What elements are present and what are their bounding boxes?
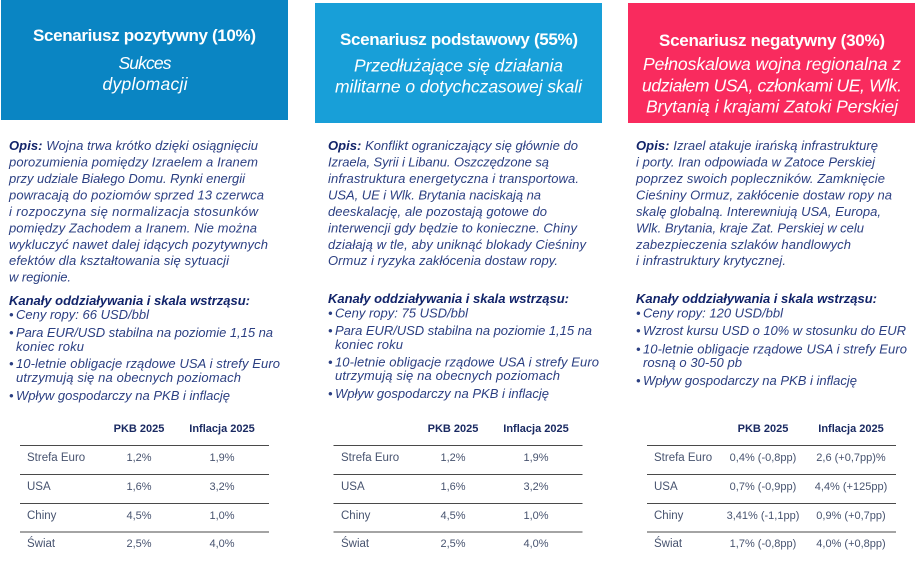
transmission channels list: • <box>328 323 333 338</box>
description text: Opis: Izrael atakuje irańską infrastrukturę <box>636 138 878 153</box>
description text: przy udziale Białego Domu. Rynki energii <box>8 171 246 186</box>
transmission channels list: Ceny ropy: 66 USD/bbl <box>16 307 150 322</box>
description text: działają w tle, aby uniknąć blokady Cieśniny <box>328 237 588 252</box>
description text: zabezpieczenia szlaków handlowych <box>635 237 851 252</box>
table: forecasts: 1,7% (-0,8pp) <box>730 538 796 550</box>
transmission channels list: rosną o 30-50 pb <box>643 355 742 370</box>
transmission channels list: Kanały oddziaływania i skala wstrząsu: <box>328 291 569 306</box>
transmission channels list: 10-letnie obligacje rządowe USA i strefy Euro <box>643 342 907 356</box>
description text: Opis: Wojna trwa krótko dzięki osiągnięciu <box>9 138 258 153</box>
description text: Cieśniny Ormuz, zakłócenie dostaw ropy na <box>636 188 892 202</box>
panel: base scenario <box>315 3 602 550</box>
table: forecasts <box>334 423 582 550</box>
table: forecasts: 1,6% <box>126 481 152 493</box>
transmission channels list: • <box>328 306 333 320</box>
description text: USA, UE i Wlk. Brytania naciskają na <box>328 188 541 202</box>
transmission channels list: Ceny ropy: 75 USD/bbl <box>335 306 469 320</box>
table: forecasts: 3,2% <box>523 481 549 493</box>
header: base scenario <box>315 3 602 123</box>
table: forecasts: Chiny <box>654 510 684 522</box>
transmission channels list: • <box>9 356 14 371</box>
header: positive scenario: Scenariusz pozytywny (10%) <box>33 26 256 45</box>
transmission channels list: • <box>636 342 641 356</box>
transmission channels list: • <box>636 306 641 320</box>
table: forecasts: PKB 2025 <box>428 423 478 435</box>
transmission channels list: • <box>636 373 641 388</box>
table: forecasts: Świat <box>27 537 56 550</box>
description text: wykluczyć nawet dalej idących pozytywnych <box>9 237 268 252</box>
panel: negative scenario <box>628 3 915 550</box>
table: forecasts: 1,6% <box>440 481 466 493</box>
description text: poprzez swoich popleczników. Zamknięcie <box>635 171 885 186</box>
transmission channels list: • <box>9 325 14 340</box>
description text: i rozpoczyna się normalizacja stosunków <box>9 204 260 219</box>
description text: Opis: Konflikt ograniczający się głównie do <box>328 138 578 153</box>
description text: i porty. Iran odpowiada w Zatoce Perskiej <box>636 154 876 170</box>
header: negative scenario: Pełnoskalowa wojna regionalna z <box>643 54 901 74</box>
description text: interwencji gdy będzie to konieczne. Chiny <box>328 220 578 236</box>
description text: i infrastruktury krytycznej. <box>636 253 786 268</box>
table: forecasts: Strefa Euro <box>341 452 399 464</box>
table: forecasts: 1,2% <box>440 452 466 464</box>
description text: Izraela, Syrii i Libanu. Oszczędzone są <box>328 154 549 170</box>
description text: w regionie. <box>9 270 71 284</box>
table: forecasts: 4,0% <box>523 538 549 550</box>
table: forecasts: 4,5% <box>126 510 152 522</box>
table: forecasts: 2,5% <box>126 538 152 550</box>
description text: skalę globalną. Interewniują USA, Europa, <box>636 204 881 219</box>
table: forecasts: 2,6 (+0,7pp)% <box>816 452 886 464</box>
header: negative scenario: Scenariusz negatywny (30%) <box>659 31 885 50</box>
description text: powracają do poziomów sprzed 13 czerwca <box>8 188 264 202</box>
transmission channels list: Para EUR/USD stabilna na poziomie 1,15 na <box>16 325 273 340</box>
table: forecasts: PKB 2025 <box>114 423 164 435</box>
table: forecasts: Strefa Euro <box>27 452 85 464</box>
table: forecasts: 1,2% <box>126 452 152 464</box>
transmission channels list: 10-letnie obligacje rządowe USA i strefy Euro <box>335 354 599 370</box>
description text: pomiędzy Zachodem a Iranem. Nie można <box>8 220 257 236</box>
transmission channels list <box>636 291 907 388</box>
transmission channels list: utrzymują się na obecnych poziomach <box>16 370 241 385</box>
table: forecasts: Strefa Euro <box>654 452 712 464</box>
table: forecasts: 2,5% <box>440 538 466 550</box>
transmission channels list: Ceny ropy: 120 USD/bbl <box>643 306 784 320</box>
table: forecasts: Chiny <box>341 510 371 522</box>
header: negative scenario <box>628 3 915 123</box>
transmission channels list: Wpływ gospodarczy na PKB i inflację <box>335 386 549 401</box>
description text: efektów dla kształtowania się sytuacji <box>9 253 230 268</box>
transmission channels list: • <box>328 386 333 401</box>
transmission channels list: 10-letnie obligacje rządowe USA i strefy Euro <box>16 356 280 371</box>
table: forecasts: 4,0% <box>209 538 235 550</box>
table: forecasts: USA <box>27 481 51 493</box>
header: base scenario: militarne o dotychczasowej skali <box>335 76 583 96</box>
transmission channels list: utrzymują się na obecnych poziomach <box>335 368 560 383</box>
table: forecasts: Inflacja 2025 <box>503 423 569 435</box>
transmission channels list: koniec roku <box>16 339 84 354</box>
table: forecasts: 1,0% <box>209 510 235 522</box>
header: negative scenario: Brytanią i krajami Zatoki Perskiej <box>646 96 899 116</box>
transmission channels list: • <box>9 307 14 322</box>
table: forecasts: 0,7% (-0,9pp) <box>730 481 796 493</box>
description text: infrastruktura energetyczna i transportowa. <box>328 171 579 186</box>
transmission channels list: Kanały oddziaływania i skala wstrząsu: <box>9 293 250 308</box>
table: forecasts: USA <box>654 481 678 493</box>
header: negative scenario: udziałem USA, członkami UE, Wlk. <box>642 76 902 96</box>
description text: deeskalację, ale pozostają gotowe do <box>328 204 547 219</box>
header: base scenario: Przedłużające się działania <box>354 56 563 76</box>
transmission channels list: Wzrost kursu USD o 10% w stosunku do EUR <box>643 323 906 338</box>
header: base scenario: Scenariusz podstawowy (55%) <box>340 30 578 49</box>
table: forecasts: 4,0% (+0,8pp) <box>816 538 886 550</box>
table: forecasts: 3,41% (-1,1pp) <box>727 510 799 522</box>
table: forecasts: Chiny <box>27 510 57 522</box>
panel: positive scenario <box>1 0 288 550</box>
table: forecasts <box>647 423 896 550</box>
description text <box>8 138 268 284</box>
transmission channels list <box>328 291 599 401</box>
table: forecasts: 1,9% <box>523 452 549 464</box>
header: positive scenario: Sukces <box>118 53 172 73</box>
description text: Ormuz i ryzyka zakłócenia dostaw ropy. <box>328 253 558 268</box>
table: forecasts: 3,2% <box>209 481 235 493</box>
table: forecasts: Świat <box>341 537 370 550</box>
transmission channels list: • <box>636 323 641 338</box>
header: positive scenario <box>1 0 288 120</box>
transmission channels list: Kanały oddziaływania i skala wstrząsu: <box>636 291 877 306</box>
table: forecasts: 4,5% <box>440 510 466 522</box>
table: forecasts: Inflacja 2025 <box>189 423 255 435</box>
header: positive scenario: dyplomacji <box>102 74 189 94</box>
table: forecasts: 0,4% (-0,8pp) <box>730 452 796 464</box>
table: forecasts: 4,4% (+125pp) <box>815 481 887 493</box>
transmission channels list: Wpływ gospodarczy na PKB i inflację <box>16 388 230 403</box>
table: forecasts: 1,0% <box>523 510 549 522</box>
transmission channels list: • <box>9 388 14 403</box>
table: forecasts: Świat <box>654 537 683 550</box>
table: forecasts: USA <box>341 481 365 493</box>
description text <box>328 138 588 268</box>
transmission channels list: Wpływ gospodarczy na PKB i inflację <box>643 373 857 388</box>
transmission channels list: koniec roku <box>335 337 403 352</box>
table: forecasts: 1,9% <box>209 452 235 464</box>
transmission channels list: Para EUR/USD stabilna na poziomie 1,15 na <box>335 323 592 338</box>
description text: porozumienia pomiędzy Izraelem a Iranem <box>8 154 258 170</box>
description text <box>635 138 892 268</box>
description text: Wlk. Brytania, kraje Zat. Perskiej w celu <box>636 220 864 236</box>
transmission channels list <box>9 293 280 403</box>
transmission channels list: • <box>328 354 333 370</box>
table: forecasts: PKB 2025 <box>738 423 788 435</box>
table: forecasts <box>20 423 269 550</box>
table: forecasts: Inflacja 2025 <box>818 423 884 435</box>
table: forecasts: 0,9% (+0,7pp) <box>816 510 886 522</box>
